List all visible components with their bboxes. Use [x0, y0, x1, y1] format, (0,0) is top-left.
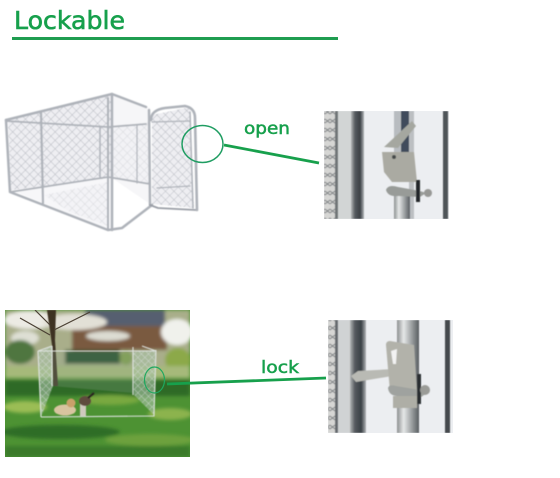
frame [6, 94, 197, 230]
photo: locked latch [328, 320, 453, 433]
dogs [54, 404, 76, 416]
tree trunk [47, 310, 58, 386]
illustration: kennel in garden photo [0, 310, 195, 457]
arrow: open connector line [224, 145, 319, 163]
mesh panels [8, 94, 112, 190]
callout: lock latch circle [144, 367, 164, 393]
callout: open latch circle [182, 126, 223, 162]
label: open: open [244, 119, 290, 138]
title: Lockable [14, 6, 125, 35]
illustration: empty kennel [6, 94, 197, 230]
photo: open latch [324, 111, 449, 219]
arrow: lock connector line [167, 378, 326, 384]
label: lock: lock [261, 358, 300, 377]
title underline [12, 37, 338, 40]
kennel panels [38, 346, 53, 417]
